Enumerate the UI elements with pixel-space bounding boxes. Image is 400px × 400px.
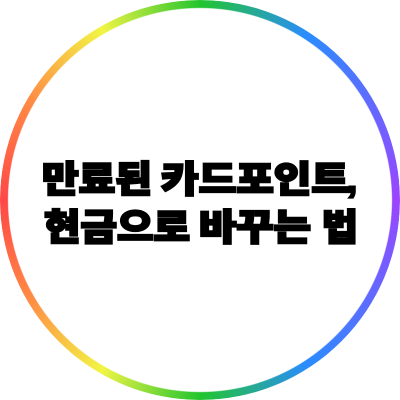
title line 2: 바꾸는 — [199, 207, 311, 248]
title line 1: 카드포인트 — [161, 159, 349, 200]
title line 2: 법 — [322, 207, 358, 248]
title line 2 — [44, 207, 358, 248]
title line 1: 만료된 — [42, 159, 152, 200]
title line 2: 현금으로 — [44, 207, 190, 248]
title line 1 — [42, 159, 357, 200]
title line 1: , — [347, 159, 357, 200]
